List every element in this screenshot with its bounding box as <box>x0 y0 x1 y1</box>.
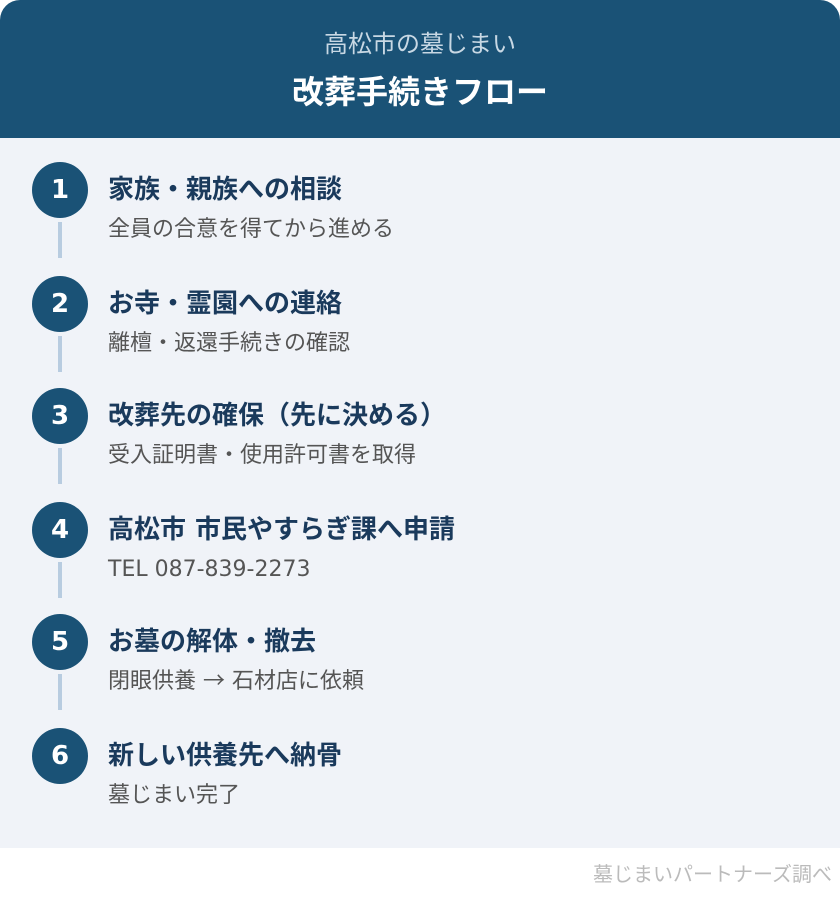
step 2 description: 離檀・返還手続きの確認 <box>108 331 350 356</box>
step 2 <box>32 276 350 372</box>
step 1 heading: 家族・親族への相談 <box>108 175 342 205</box>
step 5 description: 閉眼供養 → 石材店に依頼 <box>108 663 364 695</box>
step number 1: 1 <box>51 175 69 205</box>
step 4 heading: 高松市 市民やすらぎ課へ申請 <box>108 515 455 545</box>
step number 6: 6 <box>51 741 69 771</box>
footer credit: 墓じまいパートナーズ調べ <box>593 862 832 886</box>
step 6 heading: 新しい供養先へ納骨 <box>108 741 342 771</box>
step 2 heading: お寺・霊園への連絡 <box>108 289 342 319</box>
connector 5 <box>58 674 62 710</box>
step 4 <box>32 502 455 598</box>
step number 6 <box>32 728 88 784</box>
step 3 description: 受入証明書・使用許可書を取得 <box>108 443 416 468</box>
step number 4 <box>32 502 88 558</box>
step number 3 <box>32 388 88 444</box>
step number 2 <box>32 276 88 332</box>
connector 4 <box>58 562 62 598</box>
connector 1 <box>58 222 62 258</box>
step 6 <box>32 728 342 808</box>
step 3 <box>32 388 446 484</box>
step number 5 <box>32 614 88 670</box>
connector 3 <box>58 448 62 484</box>
step 4 description: TEL 087-839-2273 <box>108 557 310 582</box>
step 3 heading: 改葬先の確保（先に決める） <box>108 401 446 431</box>
step 5 <box>32 614 364 710</box>
panel: flow steps background <box>0 138 840 848</box>
step number 4: 4 <box>51 515 69 545</box>
subtitle: 高松市の墓じまい <box>324 30 516 58</box>
step number 2: 2 <box>51 289 69 319</box>
step number 5: 5 <box>51 627 69 657</box>
connector 2 <box>58 336 62 372</box>
step 1 <box>32 162 394 258</box>
title: 改葬手続きフロー <box>292 73 548 111</box>
step 1 description: 全員の合意を得てから進める <box>108 217 394 242</box>
step 6 description: 墓じまい完了 <box>108 783 240 808</box>
step number 1 <box>32 162 88 218</box>
header band <box>0 0 840 138</box>
step number 3: 3 <box>51 401 69 431</box>
step 5 heading: お墓の解体・撤去 <box>108 627 316 657</box>
